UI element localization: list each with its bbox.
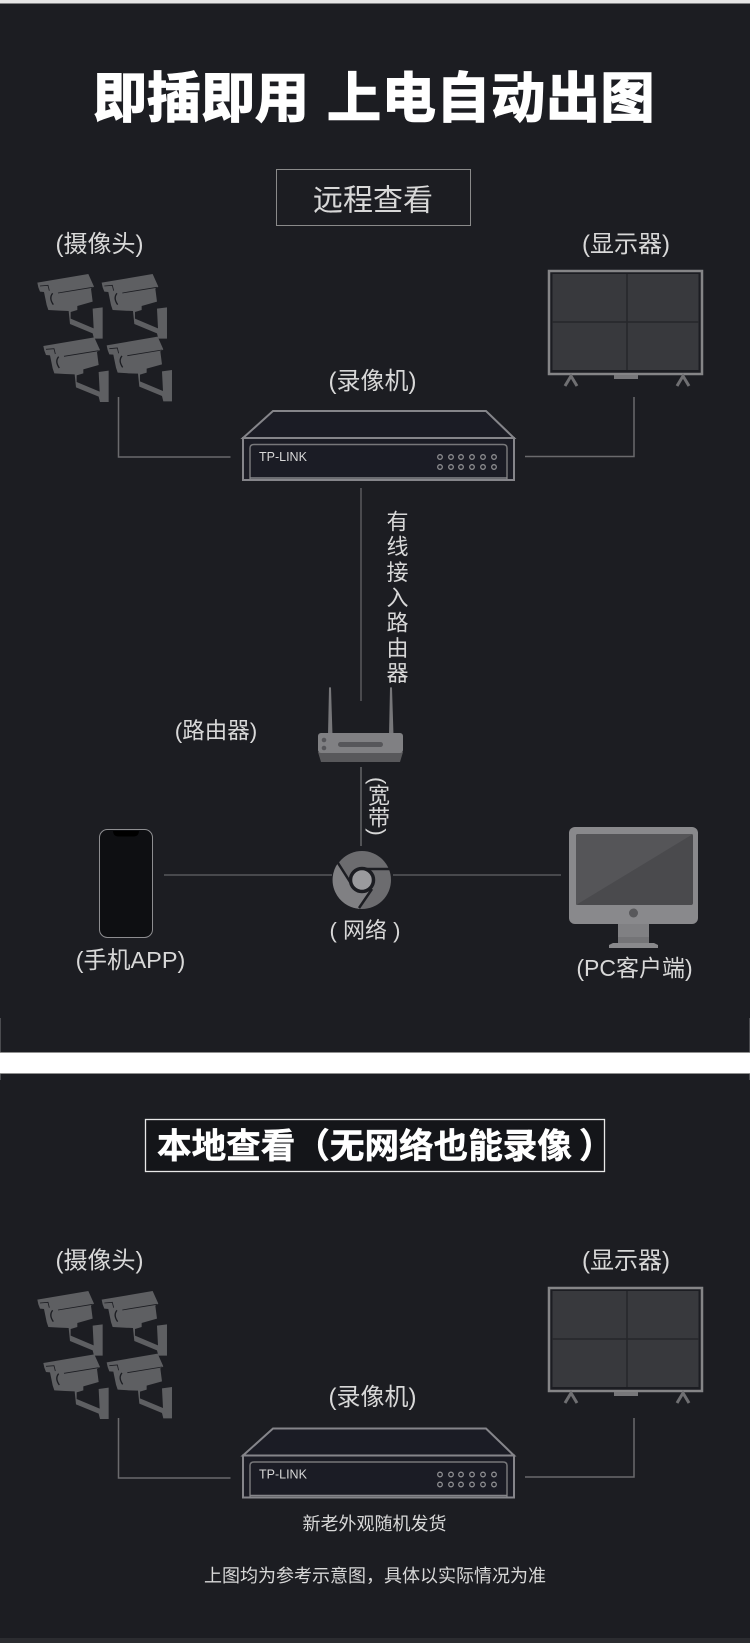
label: broadband: (宽带) [365,777,390,836]
icon: desktop monitor [569,827,698,948]
icon: recorder [243,411,514,480]
icon: router [318,687,403,762]
label: network: ( 网络 ) [330,918,400,943]
connector: phone to network [164,874,332,876]
icon: phone [100,830,152,938]
label: display: (显示器) [582,231,670,258]
connector: recorder to router [360,488,362,701]
connector: cameras to recorder [118,1418,230,1478]
label: display: (显示器) [582,1248,670,1274]
connector: display to recorder [525,397,634,456]
label: cameras: (摄像头) [56,1248,143,1274]
label: PC client: (PC客户端) [576,955,693,981]
section heading: local viewing: 本地查看（无网络也能录像） [157,1128,614,1166]
label: recorder: (录像机) [329,368,416,395]
divider band [0,1018,750,1080]
connector: network to PC [393,874,561,876]
icon: network globe [333,851,391,909]
icon: display [549,1288,702,1403]
label: cameras: (摄像头) [56,231,143,258]
section heading: remote viewing [276,170,470,226]
connector: router to network [360,767,362,846]
label: router: (路由器) [175,718,257,744]
connector: display to recorder [525,1418,634,1477]
title: 即插即用 上电自动出图 [93,69,655,129]
icon: display [549,271,702,386]
icon: recorder [243,1428,514,1498]
label: wired to router: 有线接入路由器 [384,510,408,687]
section heading: remote viewing: 远程查看 [313,184,433,218]
label: phone app: (手机APP) [76,947,185,973]
connector: cameras to recorder [118,397,230,457]
label: recorder: (录像机) [329,1384,416,1411]
icon: four cameras [37,274,172,402]
disclaimer: 上图均为参考示意图，具体以实际情况为准 [204,1566,546,1586]
note: appearance: 新老外观随机发货 [302,1514,446,1534]
icon: four cameras [37,1291,172,1419]
